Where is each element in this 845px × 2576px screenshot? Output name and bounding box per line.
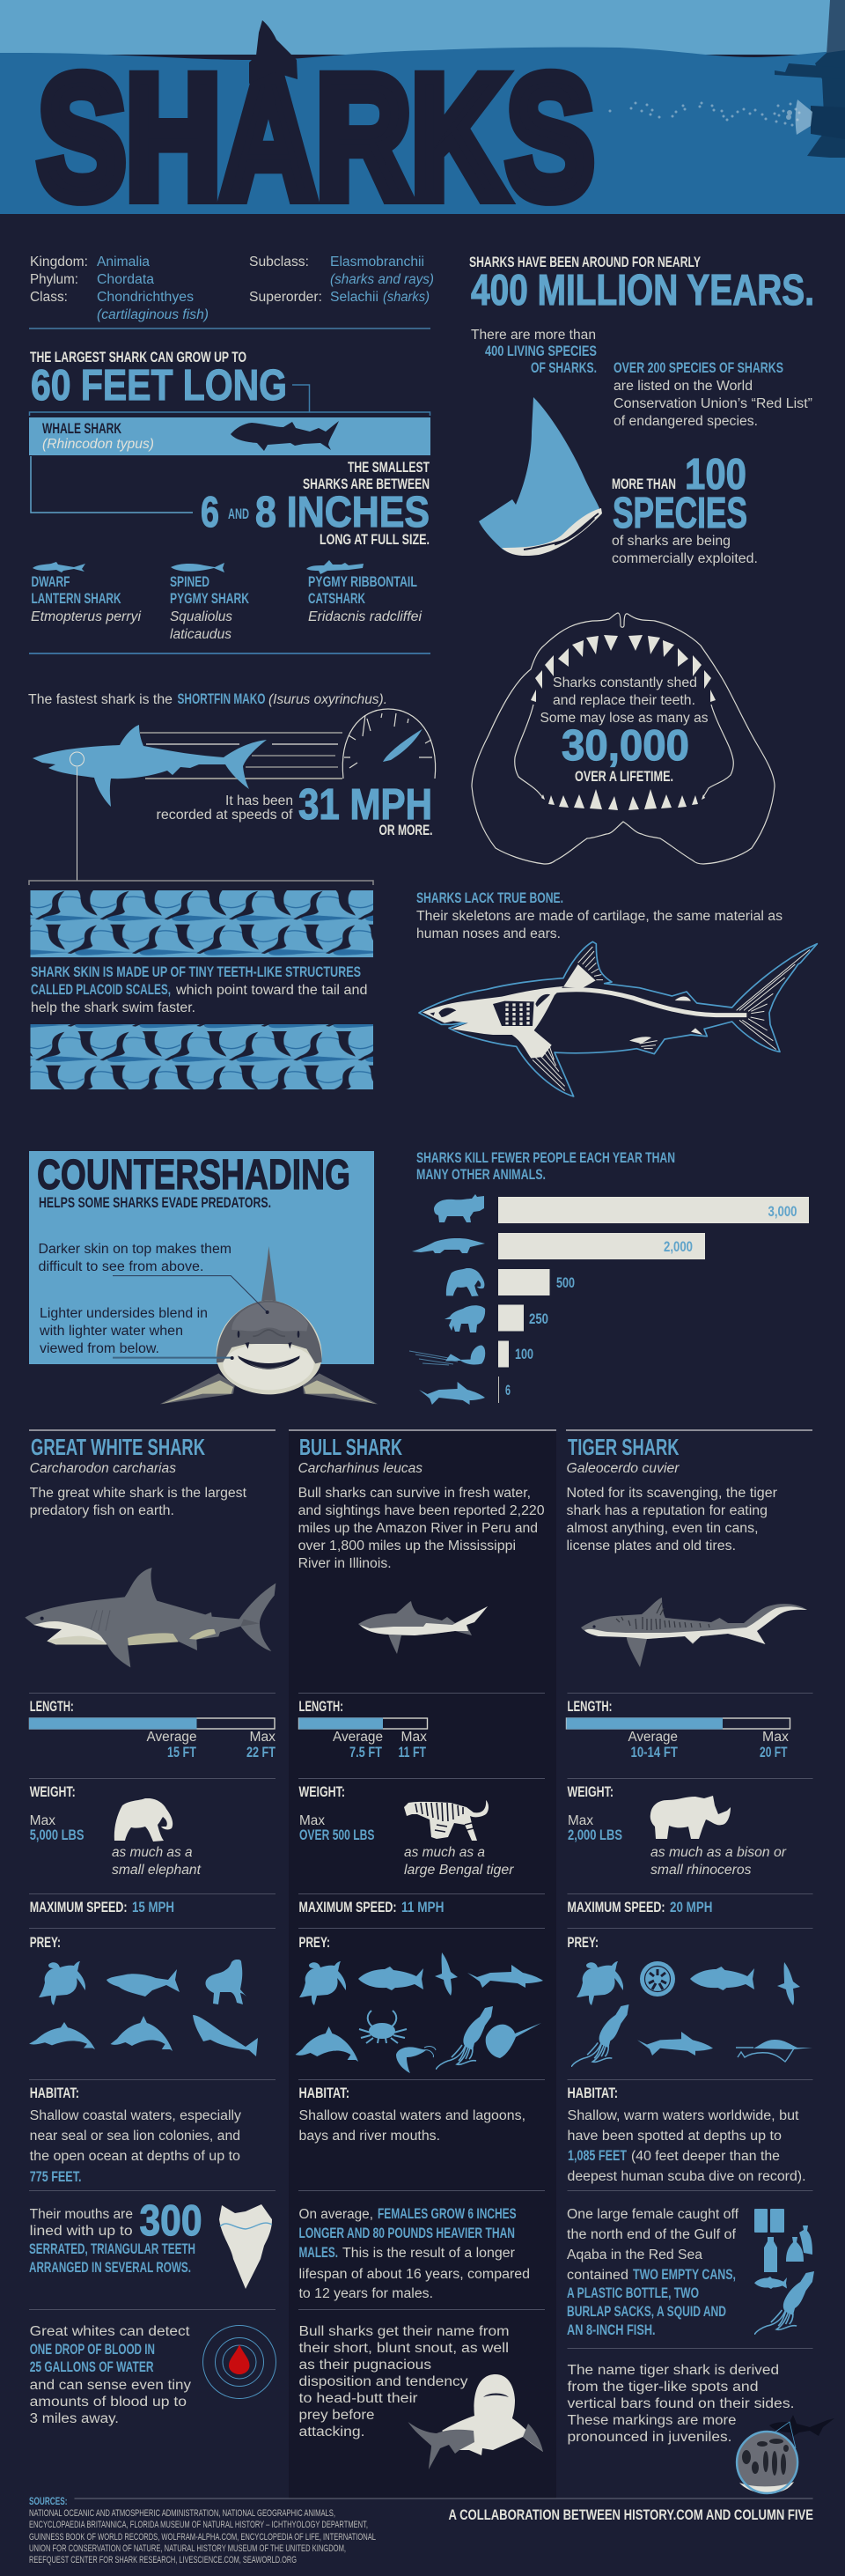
maximum speed rows: MAXIMUM SPEED: xyxy=(567,1899,665,1915)
fact: stomach contents xyxy=(567,2207,814,2338)
smallest sharks text xyxy=(31,456,430,548)
title: SHARKS: SHARKS xyxy=(38,40,594,234)
100 species stat: SPECIES xyxy=(613,489,747,537)
prey icons bull shark xyxy=(296,1952,543,2073)
length bars: 20 FT xyxy=(760,1744,788,1760)
length bars xyxy=(29,1698,790,1760)
weight rows: small elephant xyxy=(112,1863,202,1878)
icon: bull shark xyxy=(358,1601,488,1654)
length bars: Average xyxy=(333,1730,383,1745)
small shark species: PYGMY RIBBONTAIL xyxy=(308,573,417,590)
fact: 300 teeth: Their mouths are xyxy=(30,2207,133,2222)
icon: speedometer xyxy=(342,709,436,779)
prey: great white xyxy=(29,1934,258,2056)
countershading panel: difficult to see from above. xyxy=(39,1259,204,1274)
icon: whale shark xyxy=(231,421,339,451)
fastest shark heading: (Isurus oxyrinchus). xyxy=(268,692,387,707)
ray xyxy=(486,2023,541,2058)
maximum speed rows xyxy=(30,1899,712,1915)
taxonomy table: Superorder: xyxy=(249,290,322,305)
sources: GUINNESS BOOK OF WORLD RECORDS, WOLFRAM-ALPHA.COM, ENCYCLOPEDIA OF LIFE, INTERNATIONAL xyxy=(29,2532,376,2543)
length bars: Max xyxy=(250,1730,276,1745)
panel: bull shark: and sightings have been reported 2,220 xyxy=(298,1503,545,1518)
icon: juvenile tiger shark with magnifier xyxy=(737,2415,834,2493)
icon: rhinoceros xyxy=(650,1796,731,1839)
length bars: LENGTH: xyxy=(30,1698,74,1715)
shark skin text: which point toward the tail and xyxy=(175,983,368,998)
largest shark heading xyxy=(30,349,287,410)
length bars: LENGTH: xyxy=(567,1698,613,1715)
100 species stat: of sharks are being xyxy=(612,534,731,549)
bar chart: shark kills vs other animals: 2,000 xyxy=(664,1238,693,1255)
smallest sharks text: THE SMALLEST xyxy=(348,459,430,476)
panel: tiger shark: shark has a reputation for eating xyxy=(567,1503,768,1518)
largest shark heading: THE LARGEST SHARK CAN GROW UP TO xyxy=(30,349,246,365)
habitat: great white: near seal or sea lion colonies, and xyxy=(30,2129,240,2144)
fact: stomach contents: AN 8-INCH FISH. xyxy=(567,2321,656,2338)
taxonomy table: Chondrichthyes xyxy=(97,290,194,305)
icon: great white shark xyxy=(25,1568,276,1667)
tire xyxy=(640,1961,675,1997)
habitat: great white: HABITAT: xyxy=(30,2085,79,2101)
fact: drop of blood: 3 miles away. xyxy=(30,2411,119,2426)
shark jaw with teeth: Sharks constantly shed xyxy=(553,675,697,690)
icon: bull shark top view xyxy=(408,2374,543,2469)
small shark species: SPINED xyxy=(170,573,209,590)
shark skin scales pattern top xyxy=(30,890,373,957)
weight rows: 2,000 LBS xyxy=(568,1827,622,1843)
bubbles xyxy=(609,102,801,127)
habitat: great white xyxy=(30,2085,241,2185)
bar chart: shark kills vs other animals: 6 xyxy=(505,1382,511,1399)
sources xyxy=(29,2495,813,2565)
bar chart: shark kills vs other animals: 3,000 xyxy=(768,1203,797,1220)
whale shark band xyxy=(29,417,430,455)
fact: bull shark name: prey before xyxy=(299,2408,375,2423)
countershading panel xyxy=(29,1151,374,1364)
fact: drop of blood xyxy=(30,2324,276,2426)
fact: female size: to 12 years for males. xyxy=(299,2286,433,2301)
taxonomy table: Elasmobranchii xyxy=(330,255,424,269)
countershading panel: Lighter undersides blend in xyxy=(40,1306,208,1321)
shark skin scales pattern bottom xyxy=(30,1024,373,1089)
countershading panel: COUNTERSHADING xyxy=(37,1152,350,1199)
taxonomy table: Selachii xyxy=(330,290,378,305)
shark jaw with teeth: and replace their teeth. xyxy=(553,693,695,708)
panel: bull shark: Carcharhinus leucas xyxy=(298,1461,422,1476)
small shark species: DWARF xyxy=(32,573,70,590)
bar chart: shark kills vs other animals xyxy=(409,1149,809,1405)
panel: bull shark: BULL SHARK xyxy=(299,1434,402,1460)
length bars: 7.5 FT xyxy=(349,1744,382,1760)
habitat: tiger shark xyxy=(567,2085,806,2184)
fact: 300 teeth: lined with up to xyxy=(30,2224,133,2239)
fact: bull shark name: disposition and tendency xyxy=(299,2374,468,2389)
fact: tiger shark name xyxy=(567,2363,834,2493)
fact: 300 teeth: ARRANGED IN SEVERAL ROWS. xyxy=(29,2259,191,2276)
panel: bull shark: River in Illinois. xyxy=(298,1556,392,1571)
prey: great white: PREY: xyxy=(30,1934,61,1951)
panel: tiger shark: Galeocerdo cuvier xyxy=(567,1461,680,1476)
fact: tiger shark name: vertical bars found on their sides. xyxy=(567,2396,794,2411)
maximum speed rows: 15 MPH xyxy=(132,1899,174,1915)
weight rows: WEIGHT: xyxy=(299,1783,345,1800)
fact: bull shark name: their short, blunt snout, as well xyxy=(299,2341,509,2356)
smallest sharks text: AND xyxy=(228,506,249,522)
fact: stomach contents: A PLASTIC BOTTLE, TWO xyxy=(567,2284,699,2301)
bar chart: shark kills vs other animals: 500 xyxy=(556,1274,575,1291)
sources: UNION FOR CONSERVATION OF NATURE, NATURAL HISTORY MUSEUM OF THE UNITED KINGDOM, xyxy=(29,2543,346,2554)
icon: mako shark xyxy=(33,725,267,881)
smallest sharks text: LONG AT FULL SIZE. xyxy=(320,531,430,548)
cartilage text: Their skeletons are made of cartilage, the same material as xyxy=(416,909,783,924)
icons: cans, bottle, sacks, fish, squid xyxy=(754,2209,814,2335)
fact: bull shark name: as their pugnacious xyxy=(299,2358,431,2373)
length bars: LENGTH: xyxy=(299,1698,343,1715)
icon: lion xyxy=(445,1305,485,1332)
prey icons great white xyxy=(29,1960,258,2056)
sources: REEFQUEST CENTER FOR SHARK RESEARCH, LIVESCIENCE.COM, SEAWORLD.ORG xyxy=(29,2555,297,2565)
icon: shark fin on the A xyxy=(249,20,298,84)
living species text xyxy=(471,328,597,376)
length bars: 15 FT xyxy=(167,1744,196,1760)
panel: tiger shark: almost anything, even tin cans, xyxy=(567,1521,759,1536)
fact: drop of blood: and can sense even tiny xyxy=(30,2378,191,2393)
habitat: tiger shark: 1,085 FEET xyxy=(568,2147,627,2164)
fact: stomach contents: contained xyxy=(567,2268,628,2283)
fact: 300 teeth: SERRATED, TRIANGULAR TEETH xyxy=(29,2240,195,2257)
fact: bull shark name xyxy=(299,2324,543,2469)
length bars: Average xyxy=(628,1730,678,1745)
shrimp xyxy=(396,2047,436,2073)
fact: stomach contents: Aqaba in the Red Sea xyxy=(567,2248,702,2262)
fact: stomach contents: BURLAP SACKS, A SQUID AND xyxy=(567,2303,726,2320)
shark jaw with teeth xyxy=(472,613,775,864)
countershading panel: HELPS SOME SHARKS EVADE PREDATORS. xyxy=(39,1194,271,1211)
small shark species: Etmopterus perryi xyxy=(31,609,142,624)
400 million years: SHARKS HAVE BEEN AROUND FOR NEARLY xyxy=(469,254,701,270)
taxonomy table: Animalia xyxy=(97,255,150,269)
shark jaw with teeth: OVER A LIFETIME. xyxy=(575,768,673,785)
shark skin text: SHARK SKIN IS MADE UP OF TINY TEETH-LIKE STRUCTURES xyxy=(31,963,361,980)
lower teeth xyxy=(541,789,705,810)
length bars: Max xyxy=(762,1730,789,1745)
fact: bull shark name: attacking. xyxy=(299,2425,364,2439)
100 species stat: MORE THAN xyxy=(612,476,676,492)
weight rows: WEIGHT: xyxy=(567,1783,614,1800)
fact: female size: This is the result of a longer xyxy=(342,2246,515,2261)
panel: great white shark: predatory fish on earth. xyxy=(30,1503,174,1518)
weight rows: 5,000 LBS xyxy=(30,1827,84,1843)
bar chart: shark kills vs other animals: MANY OTHER ANIMALS. xyxy=(416,1166,546,1183)
speed stat: recorded at speeds of xyxy=(157,808,293,823)
section divider lines xyxy=(29,1693,813,2349)
icon: shark tooth xyxy=(219,2204,272,2289)
weight rows xyxy=(30,1783,787,1878)
habitat: great white: 775 FEET. xyxy=(30,2168,81,2185)
length bars: Max xyxy=(401,1730,427,1745)
fact: tiger shark name: These markings are more xyxy=(567,2413,736,2428)
small shark species: CATSHARK xyxy=(308,590,365,607)
fact: 300 teeth: 300 xyxy=(139,2196,202,2245)
taxonomy table xyxy=(30,255,434,322)
icon: pygmy ribbontail catshark xyxy=(306,560,364,574)
icon: shark xyxy=(419,1382,485,1405)
submarine xyxy=(775,0,845,158)
length bars: 11 FT xyxy=(398,1744,426,1760)
fact: 300 teeth xyxy=(29,2196,272,2289)
weight rows: as much as a xyxy=(112,1845,193,1860)
icon: spined pygmy shark xyxy=(171,563,224,572)
bar chart: shark kills vs other animals: 100 xyxy=(515,1346,533,1362)
fact: bull shark name: Bull sharks get their name from xyxy=(299,2324,509,2339)
taxonomy table: Class: xyxy=(30,290,68,305)
icon: shark front view xyxy=(113,1246,378,1404)
small shark species: laticaudus xyxy=(170,627,231,642)
header: ocean banner xyxy=(0,0,845,214)
fastest shark heading xyxy=(28,690,387,707)
skin callout circle and leader xyxy=(76,767,77,881)
small shark species: Eridacnis radcliffei xyxy=(308,609,422,624)
habitat: tiger shark: have been spotted at depths up to xyxy=(567,2129,782,2144)
callout lines xyxy=(113,1276,268,1358)
habitat: tiger shark: deepest human scuba dive on record). xyxy=(567,2169,806,2184)
100 species stat: 100 xyxy=(685,450,746,498)
smallest sharks text: 6 xyxy=(201,488,219,536)
whale shark band: WHALE SHARK xyxy=(42,420,122,437)
icon: tiger shark xyxy=(581,1598,807,1667)
red list text: of endangered species. xyxy=(614,414,758,429)
taxonomy table: Phylum: xyxy=(30,272,78,287)
bar chart: shark kills vs other animals: 250 xyxy=(529,1310,548,1327)
taxonomy table: Chordata xyxy=(97,272,154,287)
fact: female size: lifespan of about 16 years, compared xyxy=(299,2267,530,2282)
weight rows: OVER 500 LBS xyxy=(299,1827,375,1843)
icon: jellyfish xyxy=(409,1346,485,1365)
panel: great white shark: Carcharodon carcharias xyxy=(30,1461,176,1476)
sources: ENCYCLOPAEDIA BRITANNICA, FLORIDA MUSEUM OF NATURAL HISTORY – ICHTHYOLOGY DEPARTMENT, xyxy=(29,2520,368,2530)
maximum speed rows: 20 MPH xyxy=(670,1899,713,1915)
icon: crocodile xyxy=(412,1238,485,1253)
upper teeth xyxy=(531,635,716,702)
cartilage text xyxy=(416,889,783,941)
fact: female size xyxy=(299,2205,530,2301)
shark jaw with teeth: 30,000 xyxy=(562,721,689,770)
taxonomy table: (sharks) xyxy=(383,290,430,305)
sources: SOURCES: xyxy=(29,2495,67,2507)
manta ray xyxy=(736,2040,812,2062)
bar chart: shark kills vs other animals: SHARKS KILL FEWER PEOPLE EACH YEAR THAN xyxy=(416,1149,675,1166)
countershading panel: with lighter water when xyxy=(39,1324,183,1339)
habitat: bull shark xyxy=(299,2085,525,2144)
panel: bull shark: over 1,800 miles up the Mississippi xyxy=(298,1539,516,1554)
countershading panel: viewed from below. xyxy=(40,1341,159,1356)
speed stat: OR MORE. xyxy=(378,822,433,838)
icon: dwarf lantern shark xyxy=(33,562,85,572)
red list text: Conservation Union’s “Red List” xyxy=(614,396,812,411)
icon: cut shark fin xyxy=(479,397,602,556)
length bars: 10-14 FT xyxy=(630,1744,678,1760)
taxonomy table: Kingdom: xyxy=(30,255,88,269)
taxonomy table: (sharks and rays) xyxy=(330,272,434,287)
taxonomy table: (cartilaginous fish) xyxy=(97,307,209,322)
red list text: OVER 200 SPECIES OF SHARKS xyxy=(614,359,783,376)
cartilage text: human noses and ears. xyxy=(416,926,561,941)
fact: bull shark name: to head-butt their xyxy=(299,2391,417,2406)
weight rows: Max xyxy=(30,1813,55,1828)
panel: great white shark: GREAT WHITE SHARK xyxy=(31,1434,205,1460)
panel: bull shark xyxy=(289,1429,556,1654)
weight rows: WEIGHT: xyxy=(30,1783,76,1800)
shark jaw with teeth: Some may lose as many as xyxy=(540,711,709,726)
fact: female size: LONGER AND 80 POUNDS HEAVIER THAN xyxy=(299,2225,515,2241)
speed stat: 31 MPH xyxy=(298,780,432,829)
weight rows: as much as a xyxy=(404,1845,485,1860)
prey: bull shark: PREY: xyxy=(299,1934,330,1951)
red list text: are listed on the World xyxy=(614,379,753,394)
fact: stomach contents: TWO EMPTY CANS, xyxy=(633,2266,736,2283)
panel: great white shark: The great white shark is the largest xyxy=(30,1486,247,1501)
fact: stomach contents: One large female caught off xyxy=(567,2207,739,2222)
small shark species: Squaliolus xyxy=(170,609,232,624)
weight rows: small rhinoceros xyxy=(650,1863,752,1878)
fact: female size: On average, xyxy=(299,2207,373,2222)
sources: NATIONAL OCEANIC AND ATMOSPHERIC ADMINISTRATION, NATIONAL GEOGRAPHIC ANIMALS, xyxy=(29,2508,335,2519)
habitat: great white: Shallow coastal waters, especially xyxy=(30,2108,241,2123)
countershading panel: Darker skin on top makes them xyxy=(39,1242,231,1257)
shark skin text: CALLED PLACOID SCALES, xyxy=(31,981,171,998)
fact: female size: MALES. xyxy=(299,2244,338,2261)
fact: tiger shark name: from the tiger-like spots and xyxy=(567,2380,759,2395)
panel: tiger shark: license plates and old tires. xyxy=(567,1539,736,1554)
speed stat: It has been xyxy=(225,793,293,808)
smallest sharks text: SHARKS ARE BETWEEN xyxy=(303,476,430,492)
weight rows: as much as a bison or xyxy=(650,1845,787,1860)
length bars: Average xyxy=(146,1730,197,1745)
speed stat xyxy=(157,780,433,838)
icon: shark skeleton xyxy=(419,941,817,1096)
panel: tiger shark: TIGER SHARK xyxy=(568,1434,680,1460)
shark skin text xyxy=(31,963,368,1015)
largest shark heading: 60 FEET LONG xyxy=(31,361,287,410)
living species text: OF SHARKS. xyxy=(531,359,597,376)
living species text: There are more than xyxy=(471,328,596,343)
prey: bull shark xyxy=(296,1934,543,2073)
maximum speed rows: MAXIMUM SPEED: xyxy=(299,1899,396,1915)
red list text xyxy=(614,359,812,429)
habitat: tiger shark: HABITAT: xyxy=(567,2085,618,2101)
smallest sharks text: 8 INCHES xyxy=(255,488,430,536)
panel: tiger shark: Noted for its scavenging, the tiger xyxy=(567,1486,777,1501)
weight rows: large Bengal tiger xyxy=(404,1863,514,1878)
fact: drop of blood: amounts of blood up to xyxy=(30,2395,187,2410)
panel: great white shark xyxy=(25,1429,276,1667)
living species text: 400 LIVING SPECIES xyxy=(485,343,597,359)
icon: bengal tiger xyxy=(404,1800,489,1841)
prey: tiger shark: PREY: xyxy=(567,1934,599,1951)
icon: blood target xyxy=(202,2325,276,2399)
shark skin text: help the shark swim faster. xyxy=(31,1000,195,1015)
crab xyxy=(359,2011,407,2043)
small shark species: PYGMY SHARK xyxy=(170,590,250,607)
panel: tiger shark xyxy=(566,1429,812,1667)
prey: tiger shark xyxy=(567,1934,812,2067)
weight rows: Max xyxy=(299,1813,325,1828)
fastest shark heading: The fastest shark is the xyxy=(28,692,173,707)
habitat: bull shark: bays and river mouths. xyxy=(299,2129,440,2144)
prey icons tiger shark xyxy=(571,1961,812,2067)
small shark species: LANTERN SHARK xyxy=(32,590,121,607)
icon: elephant xyxy=(446,1268,484,1296)
whale shark band: (Rhincodon typus) xyxy=(42,437,154,452)
habitat: tiger shark: (40 feet deeper than the xyxy=(631,2149,780,2164)
habitat: great white: the open ocean at depths of up to xyxy=(30,2149,240,2164)
fact: stomach contents: the north end of the Gulf of xyxy=(567,2227,737,2242)
fact: drop of blood: 25 GALLONS OF WATER xyxy=(30,2358,154,2375)
fact: drop of blood: ONE DROP OF BLOOD IN xyxy=(30,2341,155,2358)
habitat: tiger shark: Shallow, warm waters worldwide, but xyxy=(567,2108,799,2123)
weight rows: Max xyxy=(568,1813,593,1828)
dark middle column background xyxy=(289,1430,556,2498)
icon: elephant xyxy=(114,1798,173,1842)
panel: bull shark: Bull sharks can survive in fresh water, xyxy=(298,1486,531,1501)
length bars: 22 FT xyxy=(246,1744,276,1760)
speed lines xyxy=(140,733,342,779)
100 species stat: commercially exploited. xyxy=(612,551,758,566)
small shark species xyxy=(31,560,422,642)
habitat: bull shark: Shallow coastal waters and lagoons, xyxy=(299,2108,525,2123)
panel: bull shark: miles up the Amazon River in Peru and xyxy=(298,1521,538,1536)
icon: hippo xyxy=(434,1194,484,1222)
cartilage text: SHARKS LACK TRUE BONE. xyxy=(416,889,563,906)
maximum speed rows: MAXIMUM SPEED: xyxy=(30,1899,128,1915)
fact: tiger shark name: pronounced in juveniles. xyxy=(567,2430,732,2445)
fact: drop of blood: Great whites can detect xyxy=(30,2324,190,2339)
100 species stat xyxy=(612,450,758,566)
fact: tiger shark name: The name tiger shark is derived xyxy=(567,2363,779,2378)
taxonomy table: Subclass: xyxy=(249,255,309,269)
fastest shark heading: SHORTFIN MAKO xyxy=(178,690,266,707)
fact: female size: FEMALES GROW 6 INCHES xyxy=(378,2205,517,2222)
maximum speed rows: 11 MPH xyxy=(401,1899,444,1915)
habitat: bull shark: HABITAT: xyxy=(299,2085,349,2101)
